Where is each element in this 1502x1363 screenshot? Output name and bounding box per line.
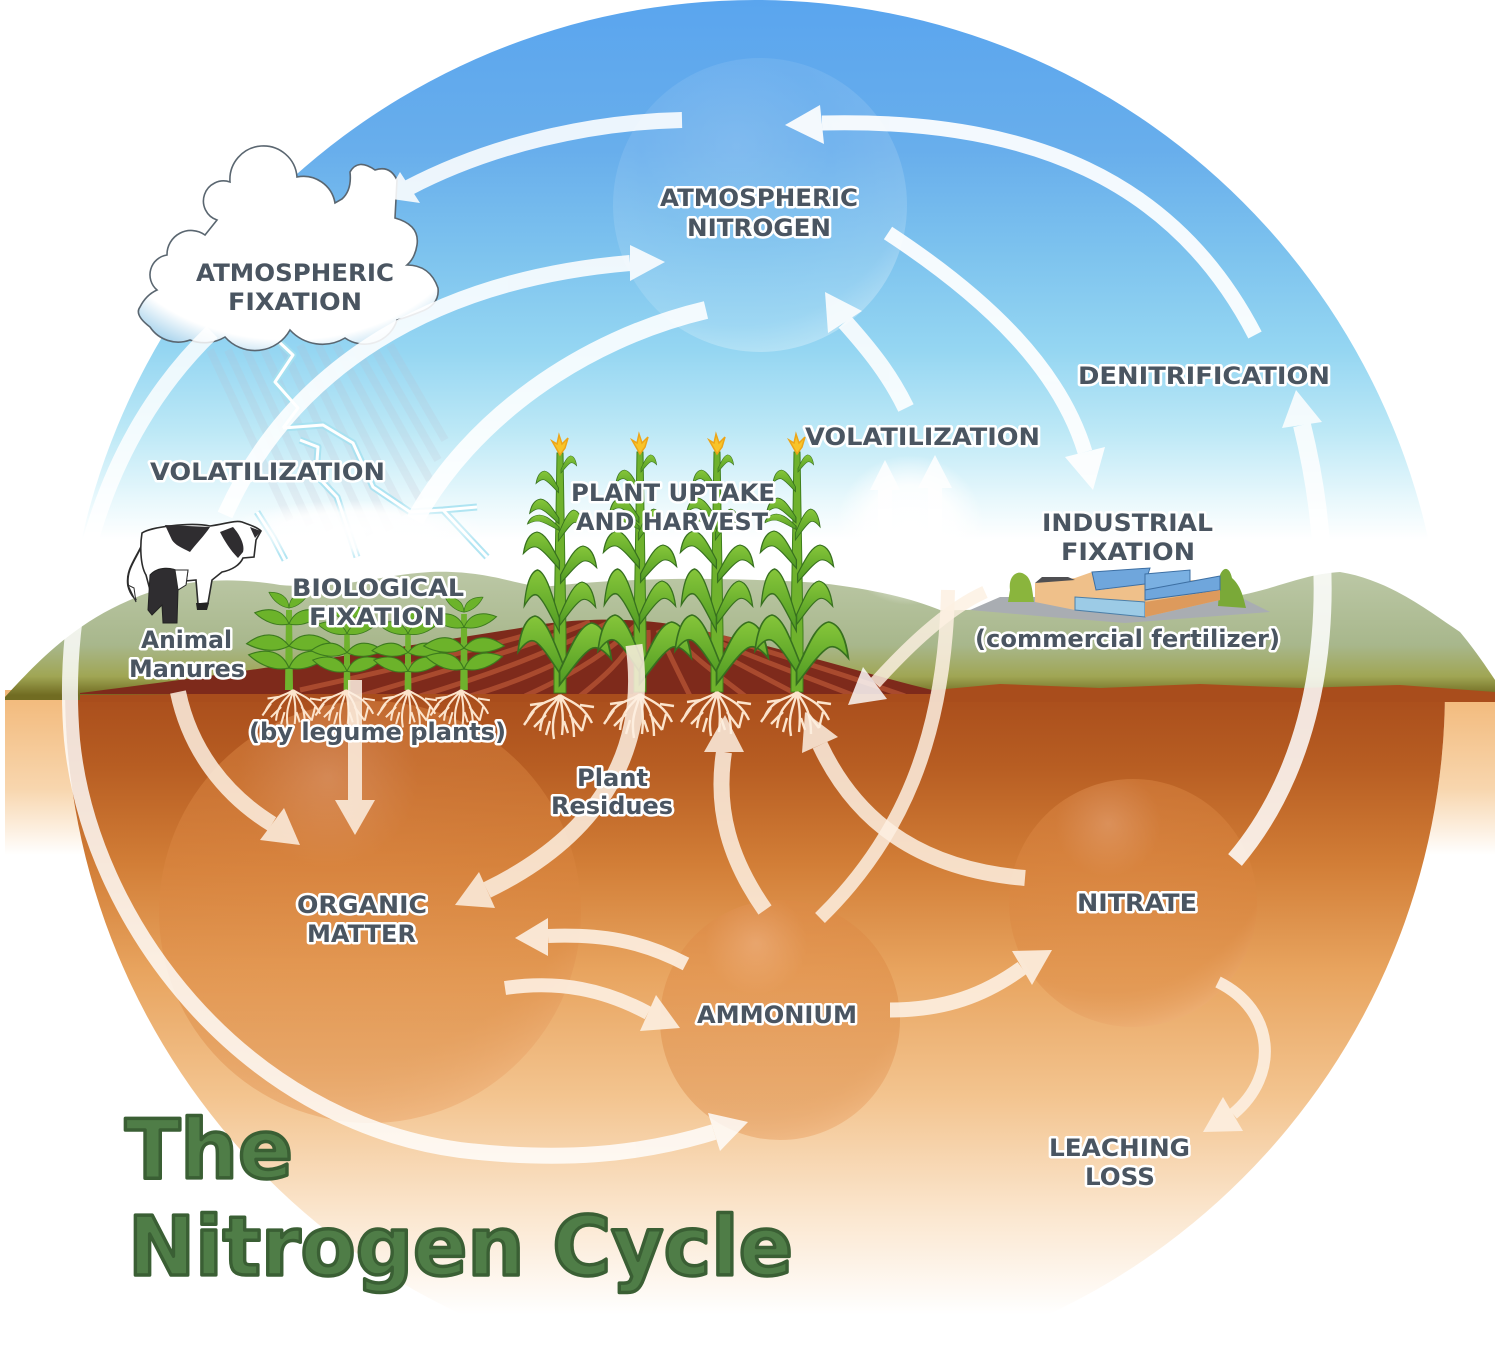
arrow: animal manures to organic matter bbox=[178, 692, 300, 845]
rain under cloud bbox=[210, 345, 445, 535]
label: industrial fixation: INDUSTRIAL bbox=[1042, 509, 1213, 537]
label: plant residues: Residues bbox=[551, 792, 673, 820]
label: industrial fixation: FIXATION bbox=[1061, 538, 1195, 566]
label: plant uptake and harvest bbox=[571, 479, 775, 536]
hills right bbox=[520, 572, 1495, 700]
arrow: denitrification to atmospheric nitrogen bbox=[785, 105, 1255, 335]
label: plant uptake and harvest: PLANT UPTAKE bbox=[571, 479, 775, 507]
label: volatilization left: VOLATILIZATION bbox=[150, 458, 385, 486]
hills left bbox=[5, 572, 640, 700]
label: atmospheric nitrogen bbox=[660, 184, 858, 242]
title: The bbox=[125, 1103, 293, 1198]
label: plant uptake and harvest: AND HARVEST bbox=[576, 508, 769, 536]
arrow: atmospheric nitrogen to industrial fixation bbox=[888, 233, 1105, 490]
icon: cloud bbox=[138, 146, 438, 351]
label: animal manures bbox=[129, 626, 245, 683]
label: leaching loss: LOSS bbox=[1085, 1163, 1155, 1191]
arrow: atmospheric nitrogen to cloud bbox=[385, 120, 682, 203]
arrow: nitrate to denitrification bbox=[1235, 390, 1323, 860]
label: biological fixation: BIOLOGICAL bbox=[292, 574, 464, 602]
arrow: legumes to organic matter bbox=[335, 680, 375, 835]
label: leaching loss: LEACHING bbox=[1049, 1134, 1190, 1162]
title bbox=[125, 1103, 793, 1295]
arrow: plant residues to organic matter bbox=[455, 645, 637, 908]
label: biological fixation: FIXATION bbox=[309, 603, 445, 631]
label: leaching loss bbox=[1049, 1134, 1190, 1191]
label: industrial fixation bbox=[1042, 509, 1213, 566]
icon: factory bbox=[970, 568, 1270, 623]
plants: legume row bbox=[246, 589, 505, 727]
white glow over hill bbox=[835, 455, 985, 605]
label: animal manures: Manures bbox=[129, 655, 245, 683]
label: nitrate: NITRATE bbox=[1077, 889, 1197, 917]
arrow: large left arc to ammonium bbox=[70, 332, 748, 1156]
title: Nitrogen Cycle bbox=[128, 1200, 793, 1295]
label: organic matter: ORGANIC bbox=[297, 891, 427, 919]
label: commercial fertilizer: (commercial fertilizer) bbox=[975, 625, 1280, 653]
label: denitrification: DENITRIFICATION bbox=[1078, 362, 1330, 390]
plants: corn row bbox=[518, 434, 848, 739]
panel: soil dome bbox=[65, 690, 1445, 1363]
bubble: nitrate bbox=[1009, 779, 1257, 1027]
label: ammonium: AMMONIUM bbox=[697, 1001, 857, 1029]
arrow: volatilization small up right bbox=[918, 455, 952, 540]
soil edge bbox=[80, 684, 1495, 702]
ploughed field bbox=[80, 620, 932, 696]
label: atmospheric fixation bbox=[196, 259, 394, 316]
label: plant residues: Plant bbox=[577, 764, 648, 792]
label: animal manures: Animal bbox=[141, 626, 232, 654]
arrow: industrial fertilizer to soil bbox=[848, 592, 985, 705]
arrow: nitrate to corn bbox=[802, 712, 1025, 878]
bubble: organic matter bbox=[159, 701, 581, 1123]
bubble: atmospheric nitrogen bbox=[613, 58, 907, 352]
arrow: ammonium to organic matter bbox=[515, 918, 686, 964]
label: plant residues bbox=[551, 764, 673, 820]
label: atmospheric nitrogen: NITROGEN bbox=[687, 214, 831, 242]
arrow: volatilization to atmospheric nitrogen bbox=[225, 245, 665, 515]
label: atmospheric fixation: ATMOSPHERIC bbox=[196, 259, 394, 287]
bubble: ammonium bbox=[660, 900, 900, 1140]
label: atmospheric nitrogen: ATMOSPHERIC bbox=[660, 184, 858, 212]
arrow: atmospheric nitrogen to biological fixation bbox=[415, 310, 706, 520]
arrow: ammonium to volatilization bbox=[820, 590, 948, 918]
arrow: ammonium to corn bbox=[704, 715, 765, 910]
arrow: volatilization to atmospheric nitrogen, right bbox=[825, 292, 906, 408]
label: organic matter bbox=[297, 891, 427, 948]
lightning bbox=[257, 340, 487, 560]
white glow behind lightning bbox=[225, 500, 485, 560]
label: by legume plants: (by legume plants) bbox=[249, 718, 506, 746]
arrow: volatilization small up left bbox=[870, 460, 900, 540]
arrow: nitrate to leaching bbox=[1203, 982, 1265, 1132]
label: atmospheric fixation: FIXATION bbox=[228, 288, 362, 316]
arrow: organic matter to ammonium bbox=[505, 985, 680, 1031]
background: soil strip at horizon bbox=[5, 690, 1495, 855]
icon: cow and calf bbox=[128, 521, 261, 623]
label: biological fixation bbox=[292, 574, 464, 631]
arrow: ammonium to nitrate bbox=[890, 950, 1052, 1010]
label: volatilization right: VOLATILIZATION bbox=[805, 423, 1040, 451]
label: organic matter: MATTER bbox=[307, 920, 416, 948]
